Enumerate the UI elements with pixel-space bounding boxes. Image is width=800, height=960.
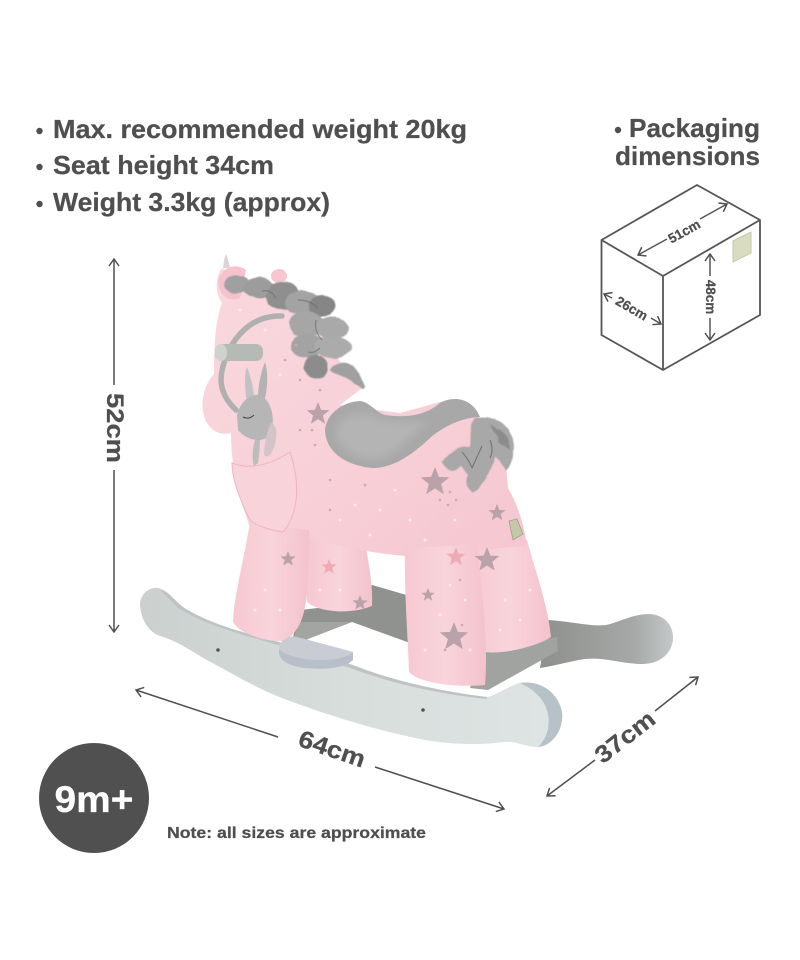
depth dimension: 37cm <box>547 677 698 796</box>
bunny toy <box>237 362 276 466</box>
packaging box diagram <box>602 185 760 370</box>
heading: packaging dimensions: Packaging <box>629 113 760 143</box>
bullet list: product specifications: Max. recommended weight 20kg <box>53 114 467 144</box>
fabric tag <box>509 519 523 540</box>
depth dimension: 37cm: 37cm <box>590 706 661 769</box>
saddle <box>325 399 480 468</box>
packaging box diagram: 51cm <box>666 217 703 246</box>
mane shadow folds <box>262 291 322 352</box>
inner front leg <box>306 535 372 611</box>
box label sticker <box>733 232 751 262</box>
width dimension: 64cm <box>136 690 504 809</box>
horn <box>223 254 230 268</box>
age badge: 9m+: 9m+ <box>54 779 134 820</box>
illustration: rocking unicorn <box>140 254 673 747</box>
pocket <box>232 452 297 532</box>
rocker screws <box>216 648 220 652</box>
note text: Note: all sizes are approximate <box>167 825 426 842</box>
seat wheel rest <box>279 637 353 669</box>
heading: packaging dimensions <box>615 113 760 171</box>
mane <box>224 275 364 388</box>
cross bars <box>291 585 410 645</box>
rear rocker <box>540 614 673 668</box>
forelock <box>218 266 246 299</box>
rear leg <box>405 545 486 686</box>
inner rear leg <box>470 540 551 653</box>
bullet list: product specifications: Weight 3.3kg (approx) <box>53 187 330 217</box>
bridle strap <box>221 316 282 410</box>
ear <box>271 269 287 283</box>
age badge: 9m+ <box>39 743 149 853</box>
packaging box diagram: 26cm <box>613 293 650 324</box>
heading: packaging dimensions: dimensions <box>615 141 760 171</box>
packaging box diagram: 48cm <box>703 280 718 314</box>
height dimension: 52cm: 52cm <box>101 393 128 463</box>
main body, neck and head <box>202 268 527 556</box>
front leg <box>233 522 309 641</box>
bullet list: product specifications <box>36 114 467 217</box>
star print <box>280 402 506 649</box>
bullet list: product specifications: Seat height 34cm <box>53 150 274 180</box>
tail folds <box>462 440 492 468</box>
tail <box>441 418 514 492</box>
handle bar <box>215 344 263 361</box>
width dimension: 64cm: 64cm <box>295 725 369 773</box>
front rocker <box>140 588 562 747</box>
